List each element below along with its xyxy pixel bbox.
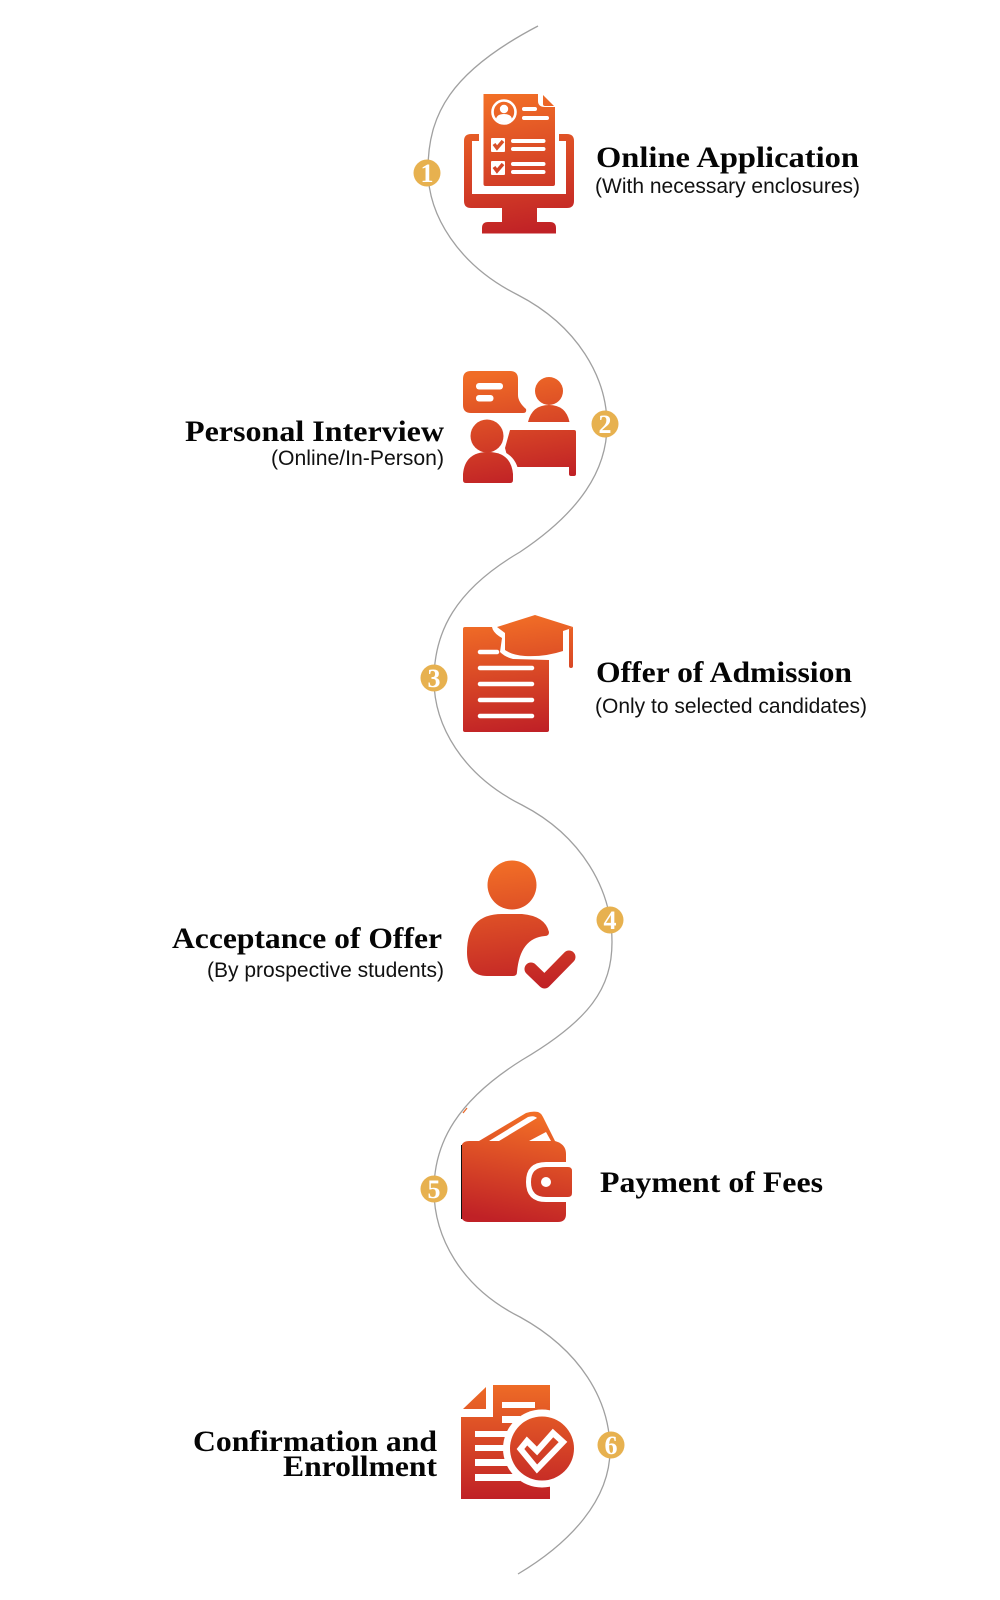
badge 3 bbox=[420, 664, 448, 693]
heading: Acceptance of Offer: Acceptance of Offer bbox=[172, 922, 442, 955]
step 3: offer of admission bbox=[420, 610, 867, 732]
badge 1 bbox=[414, 159, 440, 188]
heading: Online Application: Online Application bbox=[596, 141, 859, 174]
subtext: (Only to selected candidates) bbox=[595, 694, 867, 718]
badge 1: 1 bbox=[420, 159, 434, 188]
icon: computer with application form bbox=[464, 94, 574, 234]
heading: Confirmation and Enrollment bbox=[193, 1425, 437, 1483]
badge 6: 6 bbox=[604, 1431, 618, 1460]
icon: two people at a desk with speech bubble bbox=[458, 371, 576, 488]
badge 4: 4 bbox=[604, 906, 616, 935]
heading: Confirmation and Enrollment: Confirmation and bbox=[193, 1425, 437, 1458]
badge 5 bbox=[420, 1175, 448, 1204]
badge 5: 5 bbox=[428, 1175, 440, 1204]
heading: Confirmation and Enrollment: Enrollment bbox=[283, 1450, 437, 1483]
subtext: (With necessary enclosures) bbox=[595, 174, 860, 198]
step 4: acceptance of offer bbox=[172, 860, 624, 982]
icon: document with graduation cap bbox=[463, 610, 580, 732]
icon: document with approval check bbox=[461, 1385, 581, 1499]
step 1: online application bbox=[414, 94, 860, 234]
winding path line bbox=[428, 26, 612, 1574]
heading: Personal Interview: Personal Interview bbox=[185, 415, 444, 448]
badge 6 bbox=[598, 1431, 624, 1460]
heading: Payment of Fees: Payment of Fees bbox=[600, 1166, 823, 1199]
icon: person with check mark bbox=[467, 860, 569, 982]
badge 2: 2 bbox=[598, 410, 612, 439]
badge 2 bbox=[592, 410, 618, 439]
icon: wallet bbox=[461, 1112, 572, 1222]
badge 4 bbox=[596, 906, 624, 935]
step 2: personal interview bbox=[185, 371, 618, 488]
step 5: payment of fees bbox=[420, 1112, 823, 1222]
step 6: confirmation and enrollment bbox=[193, 1385, 624, 1499]
heading: Offer of Admission: Offer of Admission bbox=[596, 656, 852, 689]
badge 3: 3 bbox=[428, 664, 440, 693]
subtext: (Online/In-Person) bbox=[271, 446, 444, 470]
subtext: (By prospective students) bbox=[207, 958, 444, 982]
